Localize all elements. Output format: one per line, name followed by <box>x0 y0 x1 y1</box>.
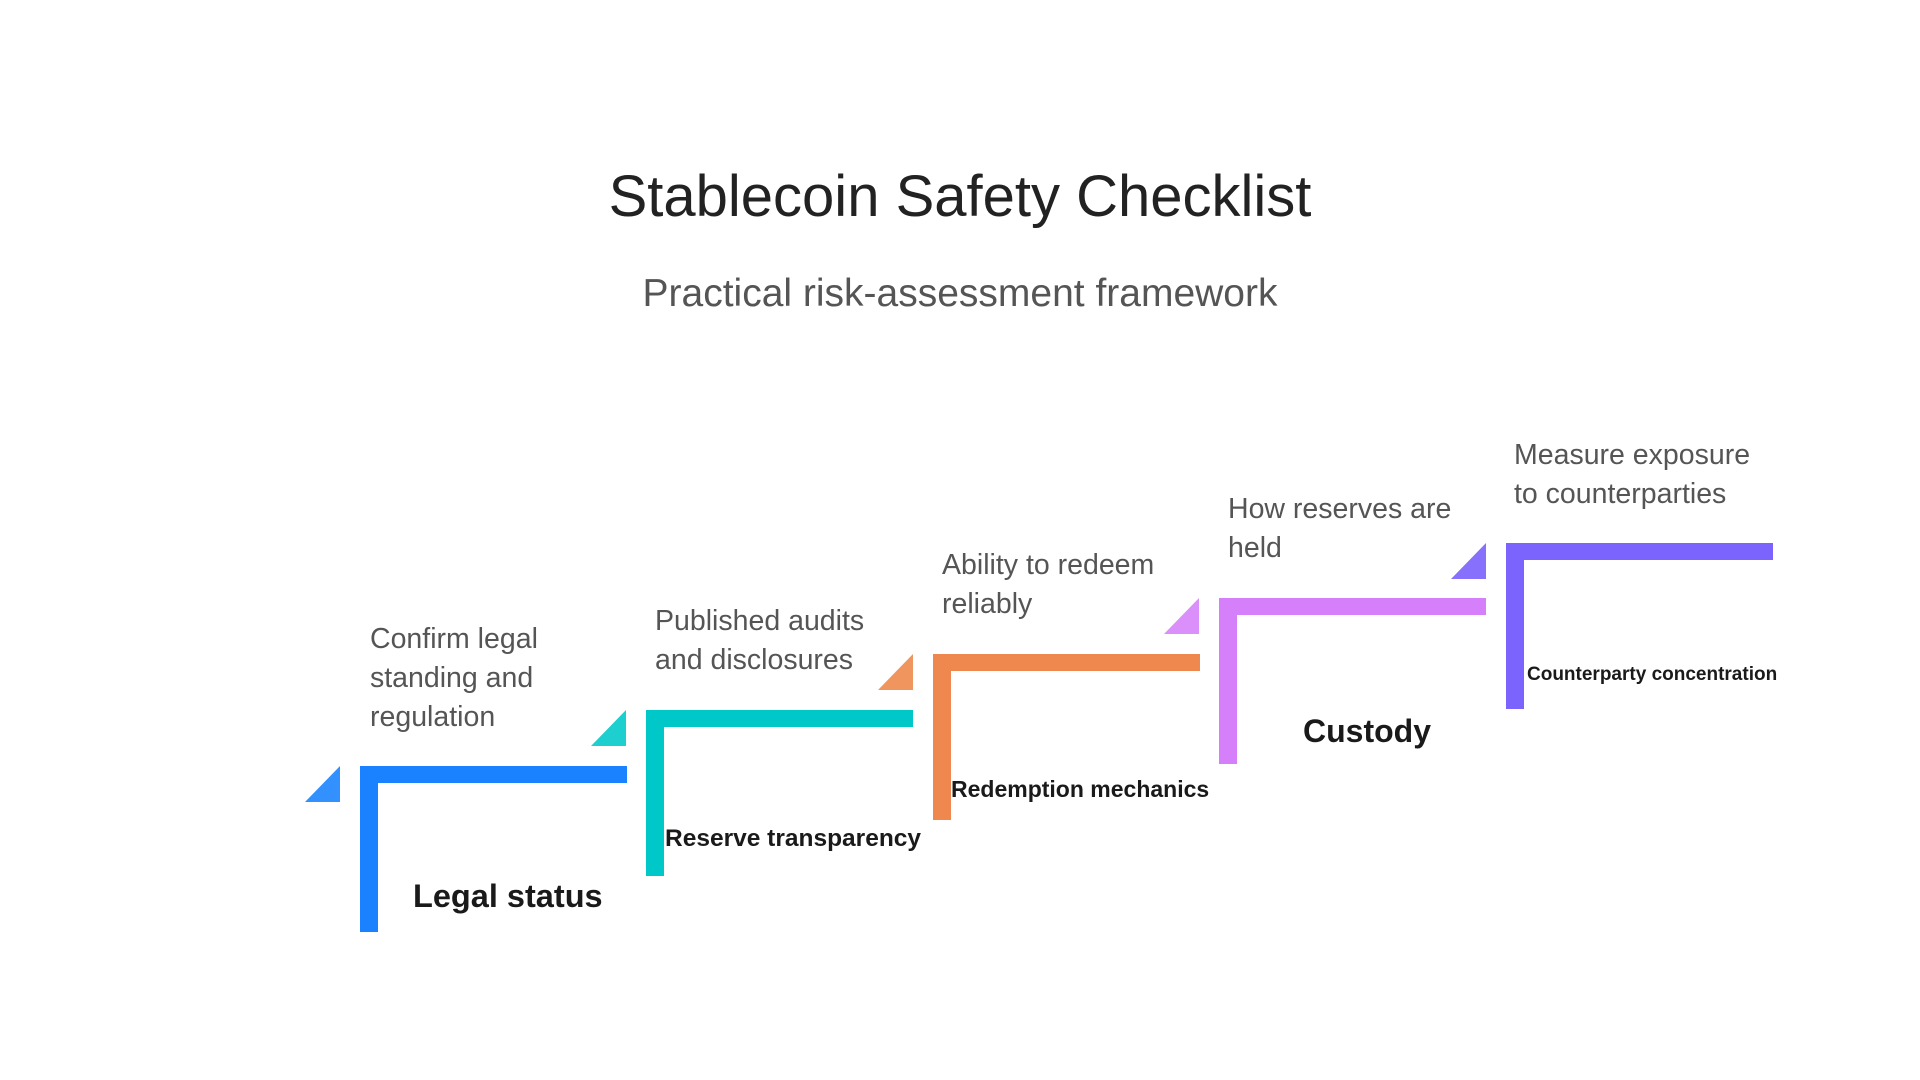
bracket teal <box>646 710 913 876</box>
icon: triangle orange <box>878 654 913 690</box>
description: standing and <box>370 662 533 694</box>
description: Measure exposure <box>1514 439 1750 471</box>
description: regulation <box>370 701 495 733</box>
description <box>1228 493 1451 564</box>
description: Confirm legal <box>370 623 538 655</box>
icon: triangle purple <box>1451 543 1486 579</box>
label: Custody <box>1303 713 1431 749</box>
description: held <box>1228 532 1282 564</box>
bracket purple <box>1506 543 1773 709</box>
bracket orange <box>933 654 1200 820</box>
subtitle: Practical risk-assessment framework <box>643 272 1277 315</box>
step 1: legal status <box>305 623 627 932</box>
icon: triangle pink <box>1164 598 1199 634</box>
label: Redemption mechanics <box>951 776 1209 802</box>
label: Counterparty concentration <box>1527 664 1777 685</box>
description: reliably <box>942 588 1032 620</box>
description: How reserves are <box>1228 493 1451 525</box>
title: Stablecoin Safety Checklist <box>609 164 1311 229</box>
description: and disclosures <box>655 644 853 676</box>
description: to counterparties <box>1514 478 1726 510</box>
description: Published audits <box>655 605 864 637</box>
step 4: custody <box>1164 493 1486 764</box>
bracket pink <box>1219 598 1486 764</box>
description <box>1514 439 1750 510</box>
step 3: redemption mechanics <box>878 549 1209 820</box>
step 5: counterparty concentration <box>1451 439 1777 709</box>
description: Ability to redeem <box>942 549 1154 581</box>
label: Reserve transparency <box>665 825 921 852</box>
icon: triangle blue <box>305 766 340 802</box>
bracket blue <box>360 766 627 932</box>
label: Legal status <box>413 878 603 914</box>
description <box>655 605 864 676</box>
icon: triangle teal <box>591 710 626 746</box>
step 2: reserve transparency <box>591 605 921 876</box>
description <box>370 623 538 733</box>
description <box>942 549 1154 620</box>
